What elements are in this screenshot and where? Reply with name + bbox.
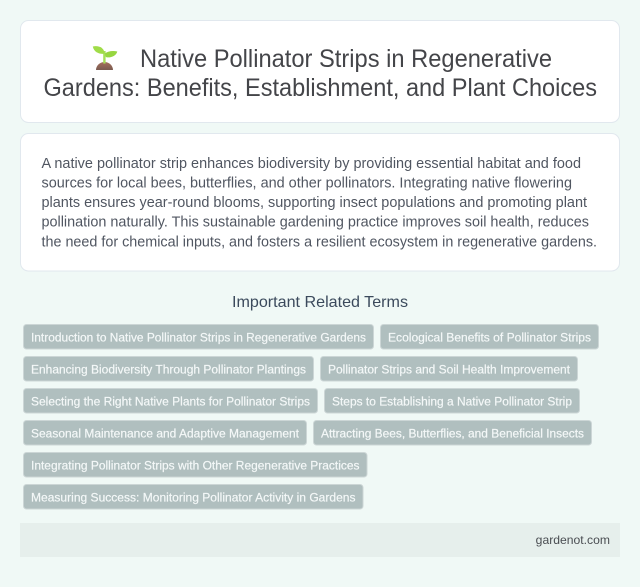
title [44, 46, 597, 102]
text block: description [42, 156, 597, 250]
title: Gardens: Benefits, Establishment, and Plant Choices [44, 75, 597, 102]
tag: integrating practices: Integrating Pollinator Strips with Other Regenerative Practices [31, 458, 360, 472]
text block: description: the need for chemical inputs, and fosters a resilient ecosystem in regenerative gardens. [42, 234, 597, 250]
tag: attracting insects [314, 420, 592, 445]
tag: introduction: Introduction to Native Pollinator Strips in Regenerative Gardens [31, 330, 366, 344]
text block: description: pollination naturally. This sustainable gardening practice improves soil health, reduces [42, 215, 589, 231]
text block: description: sources for local bees, butterflies, and other pollinators. Integrating native flowering [42, 176, 572, 192]
icon: sprout [93, 46, 117, 70]
tag: steps to establishing [324, 388, 580, 413]
tag: measuring success: Measuring Success: Monitoring Pollinator Activity in Gardens [31, 490, 356, 504]
heading: related terms: Important Related Terms [232, 294, 408, 311]
tag: attracting insects: Attracting Bees, Butterflies, and Beneficial Insects [321, 426, 584, 440]
tag: measuring success [24, 484, 363, 509]
tag: selecting plants [24, 388, 318, 413]
tag: enhancing biodiversity: Enhancing Biodiversity Through Pollinator Plantings [31, 362, 306, 376]
tag: enhancing biodiversity [24, 356, 314, 381]
tag: soil health [320, 356, 578, 381]
tag: selecting plants: Selecting the Right Native Plants for Pollinator Strips [31, 394, 310, 408]
text block: description: plants ensures year-round blooms, supporting insect populations and promoting plant [42, 195, 587, 211]
tag: ecological benefits [380, 324, 598, 349]
tag: ecological benefits: Ecological Benefits of Pollinator Strips [388, 330, 591, 344]
panel: title card [20, 20, 620, 122]
panel: related term tags [24, 324, 598, 509]
panel: description [20, 134, 620, 271]
tag: seasonal maintenance: Seasonal Maintenance and Adaptive Management [31, 426, 300, 440]
title: Native Pollinator Strips in Regenerative [140, 46, 552, 73]
tag: soil health: Pollinator Strips and Soil Health Improvement [328, 362, 571, 376]
footer: gardenot.com [536, 533, 610, 547]
tag: steps to establishing: Steps to Establishing a Native Pollinator Strip [332, 394, 572, 408]
tag: introduction [24, 324, 374, 349]
tag: seasonal maintenance [24, 420, 306, 445]
text block: description: A native pollinator strip enhances biodiversity by providing essential habitat and food [42, 156, 581, 172]
footer [20, 523, 620, 557]
tag: integrating practices [24, 452, 367, 477]
